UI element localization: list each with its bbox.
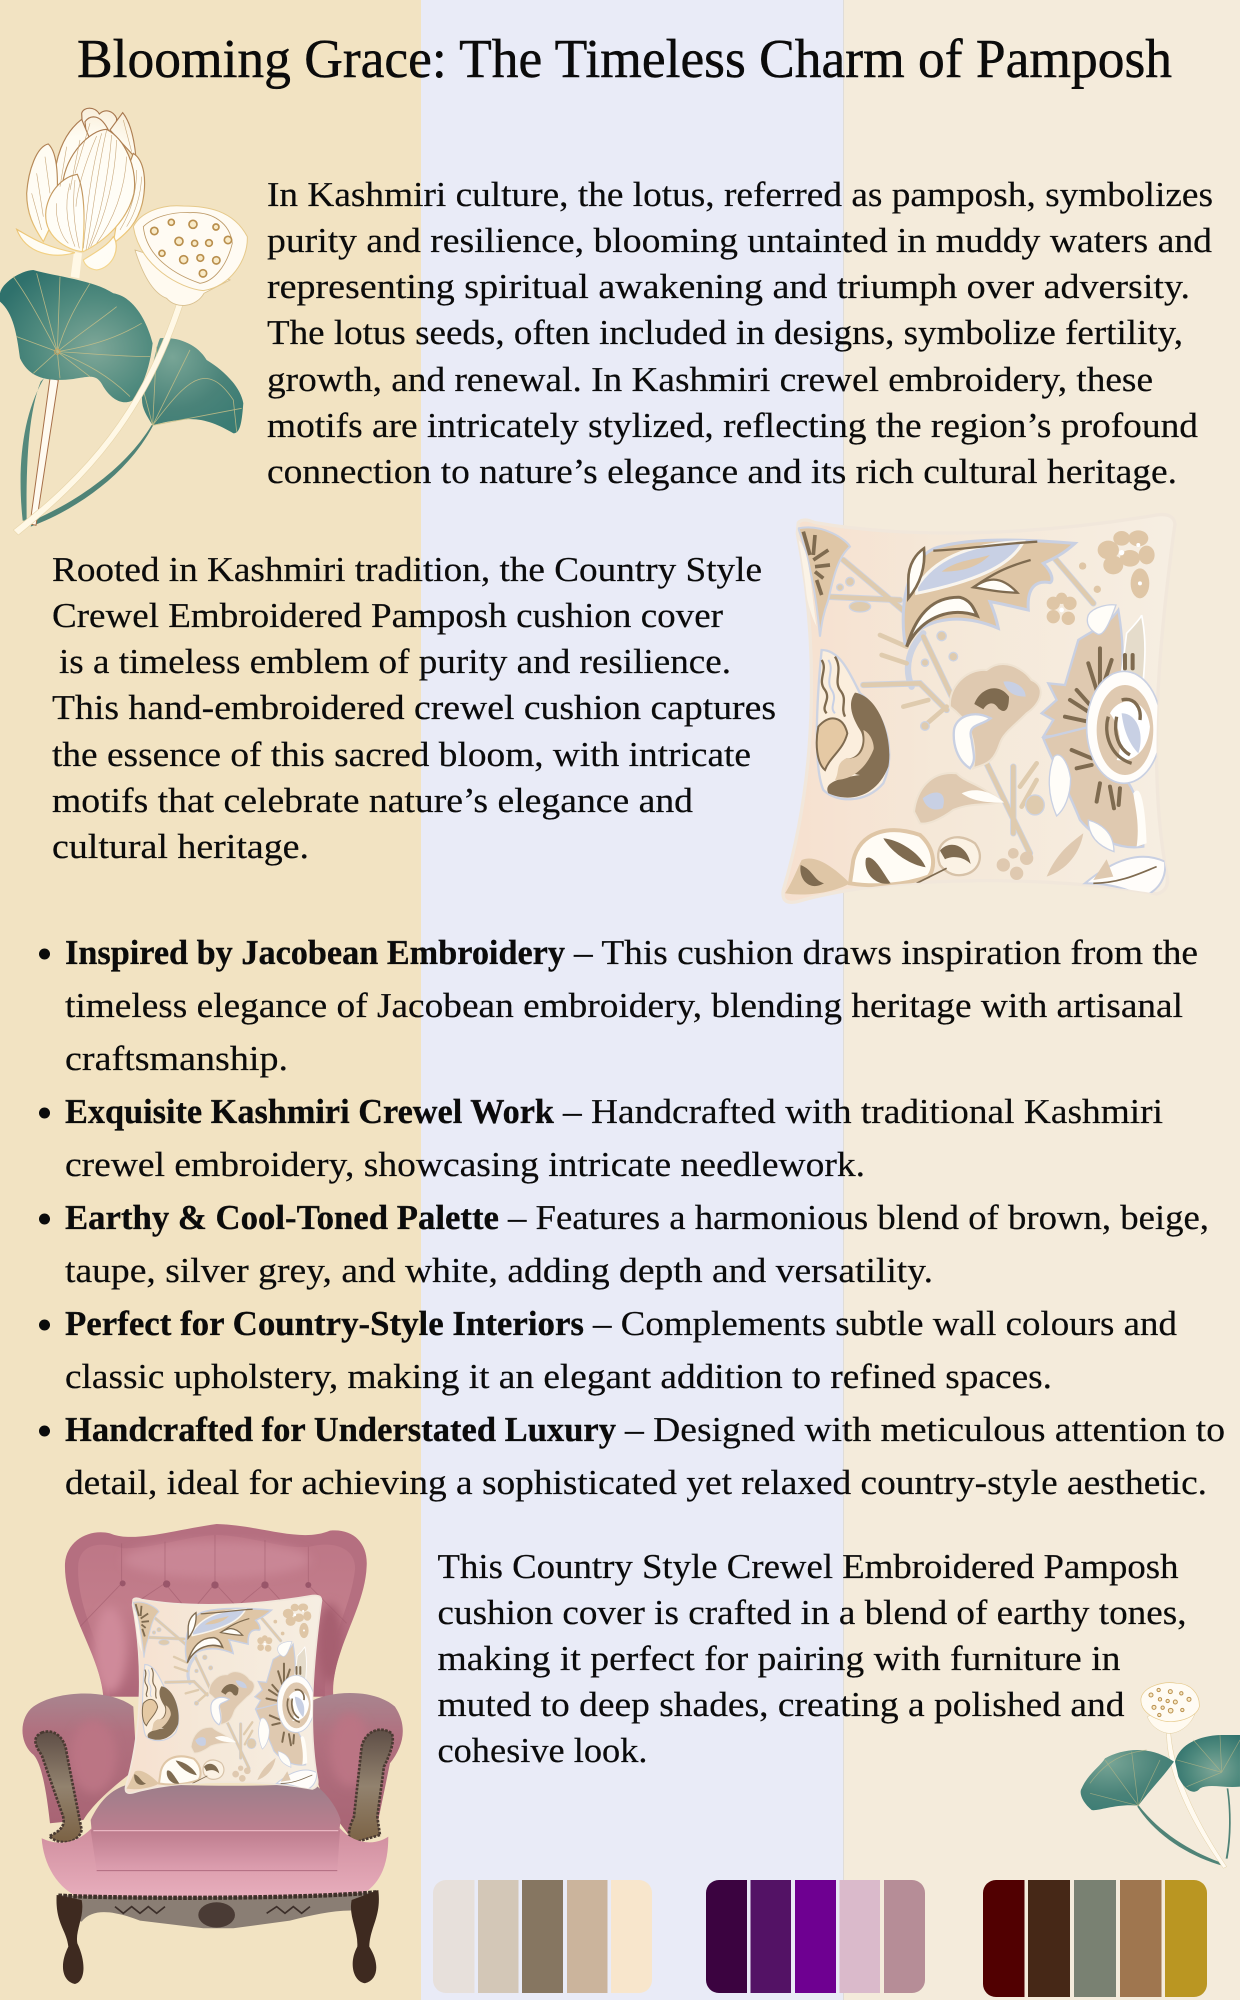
bullet: Handcrafted for Understated Luxury: Handcrafted for Understated Luxury xyxy=(65,1410,616,1449)
paragraph: Kashmiri culture and lotus symbolism: purity and resilience, blooming untainted in muddy waters and xyxy=(267,221,1213,260)
bullet: Perfect for Country-Style Interiors: – Complements subtle wall colours and xyxy=(592,1304,1178,1343)
right arm xyxy=(307,1693,403,1843)
bloom petals xyxy=(17,108,145,270)
bullet: Earthy and Cool-Toned Palette: Earthy & Cool-Toned Palette xyxy=(65,1198,499,1237)
bullet: Inspired by Jacobean Embroidery xyxy=(39,933,1198,1078)
wooden frame and legs xyxy=(56,1890,379,1984)
seed pod xyxy=(13,206,247,535)
bullet: Earthy and Cool-Toned Palette: taupe, silver grey, and white, adding depth and versatility. xyxy=(65,1251,933,1290)
bullet: Exquisite Kashmiri Crewel Work xyxy=(39,1092,1163,1184)
paragraph: crewel embroidered cushion cover: the essence of this sacred bloom, with intricate xyxy=(52,735,751,774)
colour palette: deep earthy tones xyxy=(983,1880,1207,1997)
paragraph: Kashmiri culture and lotus symbolism: motifs are intricately stylized, reflecting the region’s profound xyxy=(267,406,1199,445)
paragraph: crewel embroidered cushion cover: This hand-embroidered crewel cushion captures xyxy=(52,688,776,727)
bullet: Inspired by Jacobean Embroidery: timeless elegance of Jacobean embroidery, blending heritage with artisanal xyxy=(65,986,1183,1025)
bullet: Earthy and Cool-Toned Palette: – Features a harmonious blend of brown, beige, xyxy=(507,1198,1209,1237)
paragraph: Kashmiri culture and lotus symbolism: growth, and renewal. In Kashmiri crewel embroidery, these xyxy=(267,360,1153,399)
paragraph: pairing with furniture: muted to deep shades, creating a polished and xyxy=(438,1685,1125,1724)
paragraph: Kashmiri culture and lotus symbolism: The lotus seeds, often included in designs, symbolize fertility, xyxy=(267,313,1183,352)
small leaf xyxy=(142,338,243,433)
product photo: crewel cushion xyxy=(783,515,1175,902)
bullet: Handcrafted for Understated Luxury: – Designed with meticulous attention to xyxy=(624,1410,1225,1449)
paragraph: crewel embroidered cushion cover: Rooted in Kashmiri tradition, the Country Style xyxy=(52,550,762,589)
paragraph: Kashmiri culture and lotus symbolism xyxy=(267,175,1213,491)
bullet: Inspired by Jacobean Embroidery: Inspired by Jacobean Embroidery xyxy=(65,933,565,972)
illustration: lotus bloom, seed pod and leaves xyxy=(0,108,247,535)
cushion on chair xyxy=(125,1595,321,1793)
paragraph: crewel embroidered cushion cover xyxy=(52,550,776,866)
paragraph: Kashmiri culture and lotus symbolism: representing spiritual awakening and triumph over adversity. xyxy=(267,267,1190,306)
bullet: Inspired by Jacobean Embroidery: – This cushion draws inspiration from the xyxy=(573,933,1198,972)
bullet: Perfect for Country-Style Interiors xyxy=(39,1304,1178,1396)
bullet: Perfect for Country-Style Interiors: Perfect for Country-Style Interiors xyxy=(65,1304,584,1343)
bullet: Exquisite Kashmiri Crewel Work: Exquisite Kashmiri Crewel Work xyxy=(65,1092,555,1131)
paragraph: pairing with furniture xyxy=(438,1547,1186,1770)
large leaf xyxy=(0,270,153,402)
paragraph: pairing with furniture: cohesive look. xyxy=(438,1731,648,1770)
paragraph: crewel embroidered cushion cover: cultural heritage. xyxy=(52,827,309,866)
colour palette: neutral tones xyxy=(433,1880,652,1993)
bullet: Perfect for Country-Style Interiors: classic upholstery, making it an elegant addition to refined spaces. xyxy=(65,1357,1052,1396)
chair back xyxy=(65,1524,367,1697)
bullet: Earthy and Cool-Toned Palette xyxy=(39,1198,1209,1290)
bullet list: product features xyxy=(39,933,1225,1502)
title: Blooming Grace: The Timeless Charm of Pamposh xyxy=(77,28,1172,89)
paragraph: crewel embroidered cushion cover: motifs that celebrate nature’s elegance and xyxy=(52,781,694,820)
paragraph: crewel embroidered cushion cover: is a timeless emblem of purity and resilience. xyxy=(59,642,731,681)
paragraph: pairing with furniture: This Country Style Crewel Embroidered Pamposh xyxy=(438,1547,1179,1586)
bullet: Handcrafted for Understated Luxury: detail, ideal for achieving a sophisticated yet relaxed country-style aesthetic. xyxy=(65,1463,1207,1502)
left arm xyxy=(22,1694,137,1842)
paragraph: pairing with furniture: making it perfect for pairing with furniture in xyxy=(438,1639,1120,1678)
paragraph: pairing with furniture: cushion cover is crafted in a blend of earthy tones, xyxy=(438,1593,1186,1632)
colour palette: purple and mauve tones xyxy=(706,1880,925,1993)
paragraph: crewel embroidered cushion cover: Crewel Embroidered Pamposh cushion cover xyxy=(52,596,723,635)
illustration: small lotus pod and leaves xyxy=(1081,1683,1240,1868)
bullet: Exquisite Kashmiri Crewel Work: – Handcrafted with traditional Kashmiri xyxy=(562,1092,1163,1131)
paragraph: Kashmiri culture and lotus symbolism: In Kashmiri culture, the lotus, referred as pamposh, symbolizes xyxy=(267,175,1213,214)
bullet: Exquisite Kashmiri Crewel Work: crewel embroidery, showcasing intricate needlework. xyxy=(65,1145,865,1184)
bullet: Handcrafted for Understated Luxury xyxy=(39,1410,1225,1502)
bullet: Inspired by Jacobean Embroidery: craftsmanship. xyxy=(65,1039,288,1078)
paragraph: Kashmiri culture and lotus symbolism: connection to nature’s elegance and its rich cultural heritage. xyxy=(267,452,1177,491)
photo: pink velvet armchair with cushion xyxy=(22,1524,403,1984)
chair base xyxy=(42,1783,388,1899)
